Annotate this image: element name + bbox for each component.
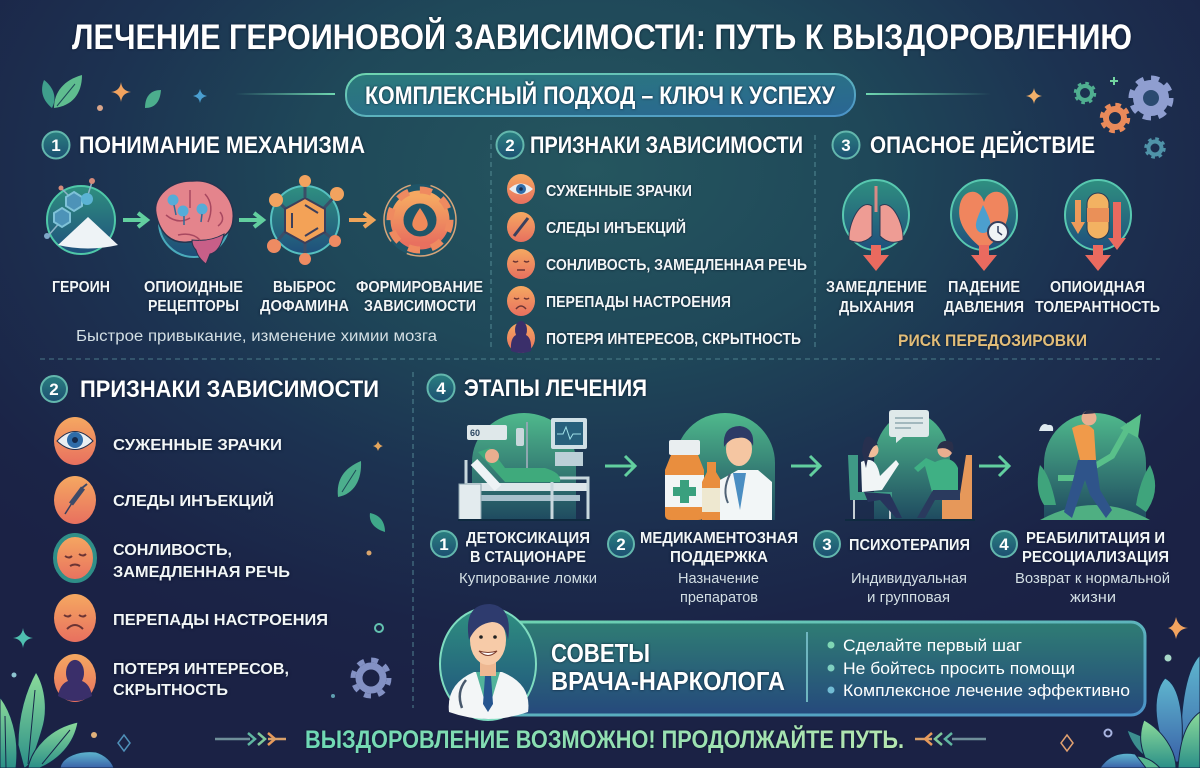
sign: drowsiness (55, 535, 290, 581)
advice heading (551, 638, 785, 696)
step 4 (991, 530, 1170, 606)
arrow (791, 456, 820, 476)
footer slogan: ВЫЗДОРОВЛЕНИЕ ВОЗМОЖНО! ПРОДОЛЖАЙТЕ ПУТЬ. (305, 724, 904, 754)
sign: loss of interest (54, 654, 289, 702)
arrow (123, 213, 147, 227)
arrow (605, 456, 635, 476)
step 2: ПОДДЕРЖКА (670, 549, 768, 566)
heading: section 3: ОПАСНОЕ ДЕЙСТВИЕ (870, 131, 1095, 159)
advice list: Комплексное лечение эффективно (843, 681, 1130, 700)
overdose risk: РИСК ПЕРЕДОЗИРОВКИ (898, 331, 1087, 350)
step 4: 4 (999, 535, 1009, 554)
label: opioid receptors: РЕЦЕПТОРЫ (148, 298, 239, 315)
icon: gear with drop (384, 184, 456, 256)
sign: mood swings (54, 594, 328, 642)
label: opioid tolerance: ТОЛЕРАНТНОСТЬ (1035, 299, 1160, 316)
illustration: doctor portrait (440, 604, 536, 720)
advice heading: ВРАЧА-НАРКОЛОГА (551, 666, 785, 696)
sign: drowsiness: СОНЛИВОСТЬ, ЗАМЕДЛЕННАЯ РЕЧЬ (546, 257, 807, 274)
heading: section 2: 2 (505, 136, 515, 155)
step 2: Назначение (678, 570, 759, 587)
dividers (413, 135, 815, 708)
caption: Быстрое привыкание, изменение химии мозга (76, 328, 437, 345)
label: slowed breathing: ДЫХАНИЯ (839, 299, 914, 316)
label: heroin: ГЕРОИН (52, 279, 110, 296)
sign: loss of interest: ПОТЕРЯ ИНТЕРЕСОВ, СКРЫТНОСТЬ (546, 331, 801, 348)
sign: mood swings: ПЕРЕПАДЫ НАСТРОЕНИЯ (113, 612, 328, 629)
sign: injection marks (507, 212, 686, 242)
panel: signs of addiction (bottom left) (41, 376, 379, 702)
label: pressure drop: ПАДЕНИЕ (948, 279, 1020, 296)
sign: loss of interest (507, 321, 801, 353)
advice heading: СОВЕТЫ (551, 638, 650, 668)
label: opioid receptors (144, 279, 243, 315)
step 2: 2 (616, 535, 626, 554)
step 2: МЕДИКАМЕНТОЗНАЯ (640, 530, 798, 547)
step 1: В СТАЦИОНАРЕ (470, 549, 586, 566)
sign: drowsiness (507, 249, 807, 279)
heading: section 4: 4 (436, 379, 446, 398)
illustration: rehabilitation (1038, 410, 1155, 520)
label: opioid tolerance (1035, 279, 1160, 316)
decor: header right gears and sparkles (1026, 77, 1170, 157)
step 4: РЕАБИЛИТАЦИЯ И (1026, 530, 1165, 547)
step 1: Купирование ломки (459, 570, 597, 587)
plant: bottom left (0, 672, 114, 768)
panel: treatment stages (428, 374, 1170, 606)
step 3: и групповая (867, 589, 950, 606)
subtitle pill (346, 74, 855, 116)
label: dopamine release (260, 279, 349, 315)
icon: blood pressure (951, 180, 1017, 271)
sign: pupils (54, 417, 282, 465)
icon: heroin (44, 178, 118, 254)
sign: pupils: СУЖЕННЫЕ ЗРАЧКИ (546, 183, 692, 200)
heading: section 1: 1 (51, 136, 61, 155)
arrow (349, 213, 373, 227)
step 2: препаратов (680, 589, 758, 606)
step 4: Возврат к нормальной (1015, 570, 1170, 587)
panel: understanding the mechanism (42, 132, 483, 345)
step 3 (814, 531, 970, 606)
advice list: Не бойтесь просить помощи (843, 659, 1075, 678)
panel: signs of addiction (top) (496, 132, 807, 353)
step 3: ПСИХОТЕРАПИЯ (849, 537, 970, 554)
step 3: Индивидуальная (851, 570, 967, 587)
step 4: РЕСОЦИАЛИЗАЦИЯ (1022, 549, 1169, 566)
advice list: Сделайте первый шаг (843, 636, 1022, 655)
step 4: жизни (1070, 589, 1116, 606)
illustration: hospital detox: 60 (470, 428, 480, 438)
heading: section 1: ПОНИМАНИЕ МЕХАНИЗМА (79, 132, 365, 159)
step 1 (431, 530, 597, 587)
illustration: psychotherapy (845, 410, 975, 520)
step 3: 3 (822, 535, 832, 554)
step 2 (608, 530, 798, 606)
label: opioid tolerance: ОПИОИДНАЯ (1050, 279, 1145, 296)
sign: loss of interest: ПОТЕРЯ ИНТЕРЕСОВ, (113, 661, 289, 678)
sign: drowsiness: ЗАМЕДЛЕННАЯ РЕЧЬ (113, 564, 290, 581)
icon: lungs (843, 180, 909, 271)
sign: pupils: СУЖЕННЫЕ ЗРАЧКИ (113, 437, 282, 454)
sign: loss of interest: СКРЫТНОСТЬ (113, 682, 228, 699)
heading: section 4: ЭТАПЫ ЛЕЧЕНИЯ (464, 375, 647, 402)
subtitle pill: КОМПЛЕКСНЫЙ ПОДХОД – КЛЮЧ К УСПЕХУ (365, 80, 835, 110)
ornament: footer left (215, 733, 286, 745)
step 1: ДЕТОКСИКАЦИЯ (466, 530, 590, 547)
sign: injection marks (54, 476, 274, 524)
icon: tolerance (1065, 180, 1131, 271)
advice list (828, 636, 1130, 700)
panel: addiction doctor advice (440, 604, 1145, 720)
icon: brain with opioid receptors (155, 181, 233, 264)
heading: section 2: ПРИЗНАКИ ЗАВИСИМОСТИ (530, 132, 803, 159)
label: addiction formation: ФОРМИРОВАНИЕ (356, 279, 483, 296)
label: addiction formation (356, 279, 483, 315)
heading: section 3: 3 (841, 136, 851, 155)
label: dopamine release: ВЫБРОС (273, 279, 336, 296)
heading: section 2 repeated: ПРИЗНАКИ ЗАВИСИМОСТИ (80, 376, 379, 403)
arrow (979, 456, 1009, 476)
label: slowed breathing (826, 279, 927, 316)
illustration: medication support (665, 413, 775, 520)
icon: dopamine molecule (267, 175, 344, 265)
sign: drowsiness: СОНЛИВОСТЬ, (113, 542, 232, 559)
arrow (239, 213, 263, 227)
sign: mood swings (507, 286, 731, 316)
step 1: 1 (439, 535, 449, 554)
ornament: footer right (915, 733, 986, 745)
decor: bottom right sparkles (1061, 617, 1188, 751)
sign: pupils (507, 174, 692, 204)
panel: dangerous action (826, 131, 1160, 350)
label: pressure drop: ДАВЛЕНИЯ (944, 299, 1024, 316)
decor: bottom left dots (91, 732, 130, 751)
sign: mood swings: ПЕРЕПАДЫ НАСТРОЕНИЯ (546, 294, 731, 311)
heading: section 2 repeated: 2 (49, 380, 59, 399)
label: opioid receptors: ОПИОИДНЫЕ (144, 279, 243, 296)
sign: injection marks: СЛЕДЫ ИНЪЕКЦИЙ (546, 218, 686, 237)
label: slowed breathing: ЗАМЕДЛЕНИЕ (826, 279, 927, 296)
decor: left column leaves and gear (12, 441, 389, 698)
plant: bottom right (1100, 655, 1200, 768)
illustration: hospital detox (458, 413, 590, 520)
label: addiction formation: ЗАВИСИМОСТИ (364, 298, 476, 315)
label: dopamine release: ДОФАМИНА (260, 298, 349, 315)
decor: header left leaves and sparkles (42, 75, 207, 111)
label: pressure drop (944, 279, 1024, 316)
sign: injection marks: СЛЕДЫ ИНЪЕКЦИЙ (113, 491, 274, 510)
